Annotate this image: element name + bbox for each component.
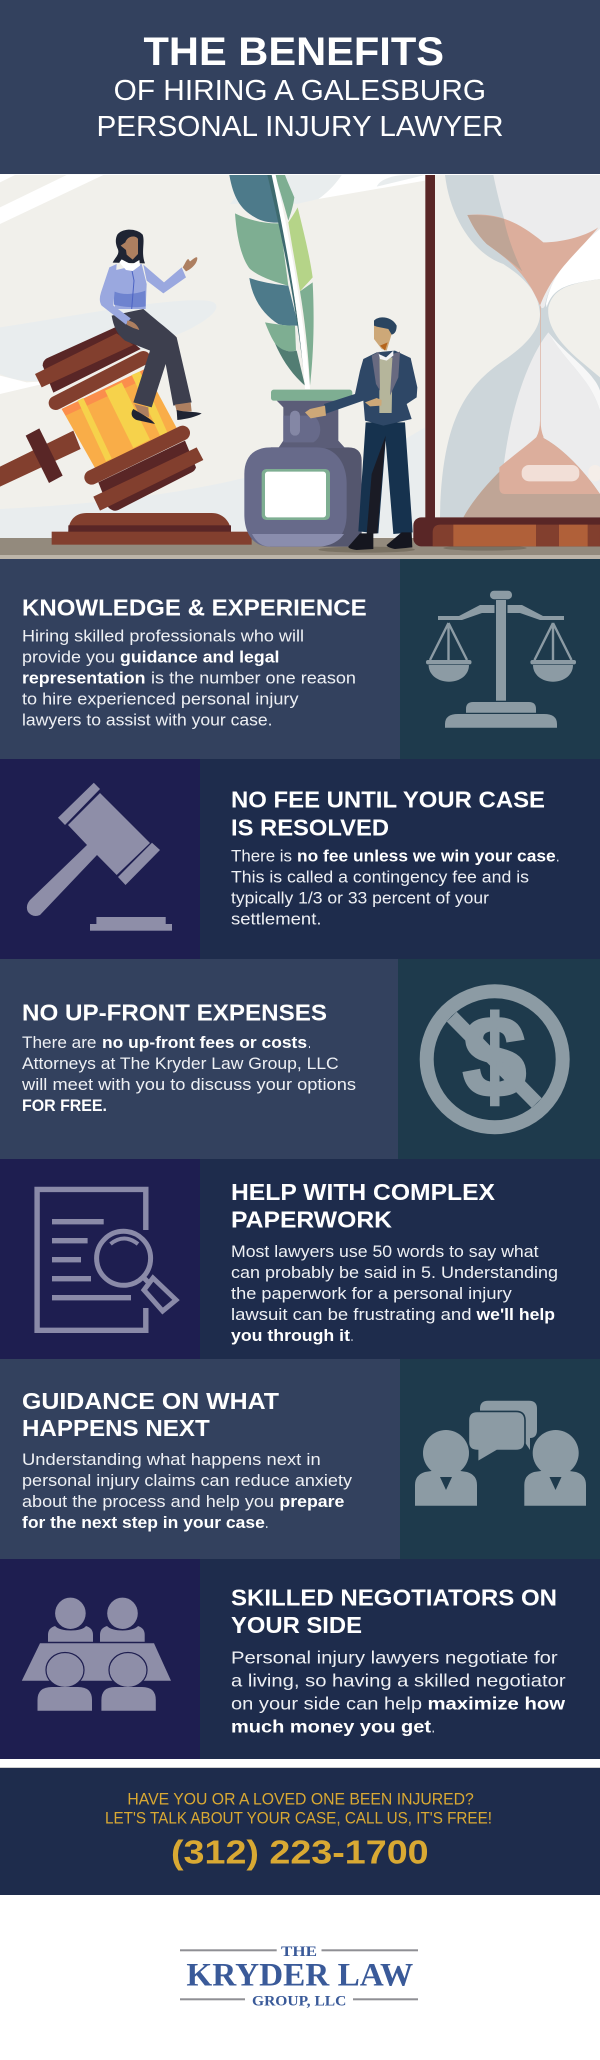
text block: can probably be said in 5. Understanding: [231, 1264, 558, 1282]
text block: settlement.: [231, 911, 322, 929]
logo: The Kryder Law Group: THE: [281, 1944, 317, 1960]
text block: lawsuit can be frustrating and: [231, 1306, 472, 1324]
icon: no dollar sign: $: [463, 994, 526, 1121]
text block: .: [308, 1034, 311, 1052]
text block: no fee unless we win your case: [297, 848, 556, 866]
floor: [0, 538, 600, 559]
text block: Most lawyers use 50 words to say what: [231, 1243, 539, 1261]
text block: [22, 628, 356, 730]
text block: There are: [22, 1034, 96, 1052]
text block: will meet with you to discuss your options: [21, 1076, 356, 1094]
panel: no fee until resolved: [0, 759, 600, 959]
header banner: [0, 0, 600, 174]
text block: lawyers to assist with your case.: [22, 712, 272, 730]
text block: no up-front fees or costs: [102, 1034, 307, 1052]
text block: [21, 1034, 356, 1115]
call to action text: LET'S TALK ABOUT YOUR CASE, CALL US, IT'S FREE!: [105, 1809, 492, 1827]
hero illustration: [0, 174, 600, 559]
text block: a living, so having a skilled negotiator: [231, 1671, 566, 1691]
title: PERSONAL INJURY LAWYER: [96, 111, 504, 143]
text block: to hire experienced personal injury: [22, 691, 299, 709]
text block: representation: [22, 670, 146, 688]
icon: document with magnifier: [37, 1189, 176, 1330]
text block: typically 1/3 or 33 percent of your: [231, 890, 490, 908]
call to action text: [105, 1790, 492, 1827]
logo: The Kryder Law Group: KRYDER LAW: [186, 1958, 413, 1994]
heading: NO UP-FRONT EXPENSES: [22, 1000, 327, 1026]
text block: Personal injury lawyers negotiate for: [231, 1648, 558, 1668]
text block: personal injury claims can reduce anxiety: [22, 1472, 353, 1490]
heading: GUIDANCE ON WHAT: [22, 1388, 280, 1414]
heading: [22, 1388, 280, 1441]
title: OF HIRING A GALESBURG: [114, 75, 486, 107]
text block: .: [432, 1717, 435, 1737]
heading: HELP WITH COMPLEX: [231, 1179, 495, 1205]
icon: hourglass: [413, 175, 600, 551]
text block: provide you: [22, 649, 115, 667]
text block: about the process and help you: [22, 1493, 274, 1511]
text block: maximize how: [428, 1694, 565, 1714]
heading: HAPPENS NEXT: [22, 1415, 210, 1441]
heading: KNOWLEDGE & EXPERIENCE: [22, 595, 367, 621]
phone number: (312) 223-1700: [171, 1834, 429, 1871]
panel: guidance on what happens next: [0, 1359, 600, 1559]
text block: we'll help: [475, 1306, 555, 1324]
panel: no up-front expenses: [0, 959, 600, 1159]
heading: [231, 786, 545, 840]
heading: NO FEE UNTIL YOUR CASE: [231, 786, 545, 812]
text block: [231, 1648, 566, 1737]
panel: help with complex paperwork: [0, 1159, 600, 1359]
text block: Hiring skilled professionals who will: [22, 628, 304, 646]
text block: you through it: [231, 1327, 351, 1345]
icon: people at negotiating table: [22, 1598, 171, 1711]
panel: skilled negotiators: [0, 1559, 600, 1759]
logo: The Kryder Law Group: GROUP, LLC: [252, 1993, 346, 2009]
title: [96, 30, 504, 143]
text block: .: [265, 1514, 268, 1532]
text block: .: [350, 1327, 354, 1345]
figure: woman sitting on gavel: [100, 230, 202, 424]
icon: quill feather: [229, 175, 314, 389]
text block: is the number one reason: [151, 670, 356, 688]
text block: [231, 848, 560, 929]
figure: man in suit: [305, 317, 417, 553]
text block: FOR FREE.: [22, 1097, 107, 1115]
text block: the paperwork for a personal injury: [231, 1285, 513, 1303]
text block: for the next step in your case: [22, 1514, 265, 1532]
panel: knowledge and experience: [0, 559, 600, 759]
text block: There is: [231, 848, 292, 866]
heading: IS RESOLVED: [231, 814, 389, 840]
text block: .: [556, 848, 560, 866]
text block: prepare: [279, 1493, 344, 1511]
text block: on your side can help: [231, 1694, 422, 1714]
text block: Understanding what happens next in: [22, 1451, 321, 1469]
logo: The Kryder Law Group: [180, 1944, 418, 2009]
icon: oversized gavel: [0, 327, 252, 545]
heading: PAPERWORK: [231, 1207, 392, 1233]
text block: Attorneys at The Kryder Law Group, LLC: [22, 1055, 339, 1073]
icon: gavel: [27, 783, 172, 931]
heading: [231, 1179, 495, 1233]
icon: two people talking: [415, 1401, 586, 1506]
text block: [231, 1243, 558, 1345]
icon: no dollar sign: [427, 991, 563, 1127]
call to action banner: [0, 1767, 600, 1895]
icon: ink bottle: [244, 390, 362, 547]
heading: SKILLED NEGOTIATORS ON: [231, 1585, 557, 1611]
text block: This is called a contingency fee and is: [231, 869, 529, 887]
text block: guidance and legal: [120, 649, 280, 667]
text block: much money you get: [231, 1717, 431, 1737]
heading: YOUR SIDE: [231, 1612, 362, 1638]
call to action text: HAVE YOU OR A LOVED ONE BEEN INJURED?: [127, 1790, 474, 1808]
text block: [22, 1451, 353, 1532]
icon: scales of justice: [426, 591, 576, 728]
heading: [231, 1585, 557, 1638]
title: THE BENEFITS: [144, 30, 444, 74]
